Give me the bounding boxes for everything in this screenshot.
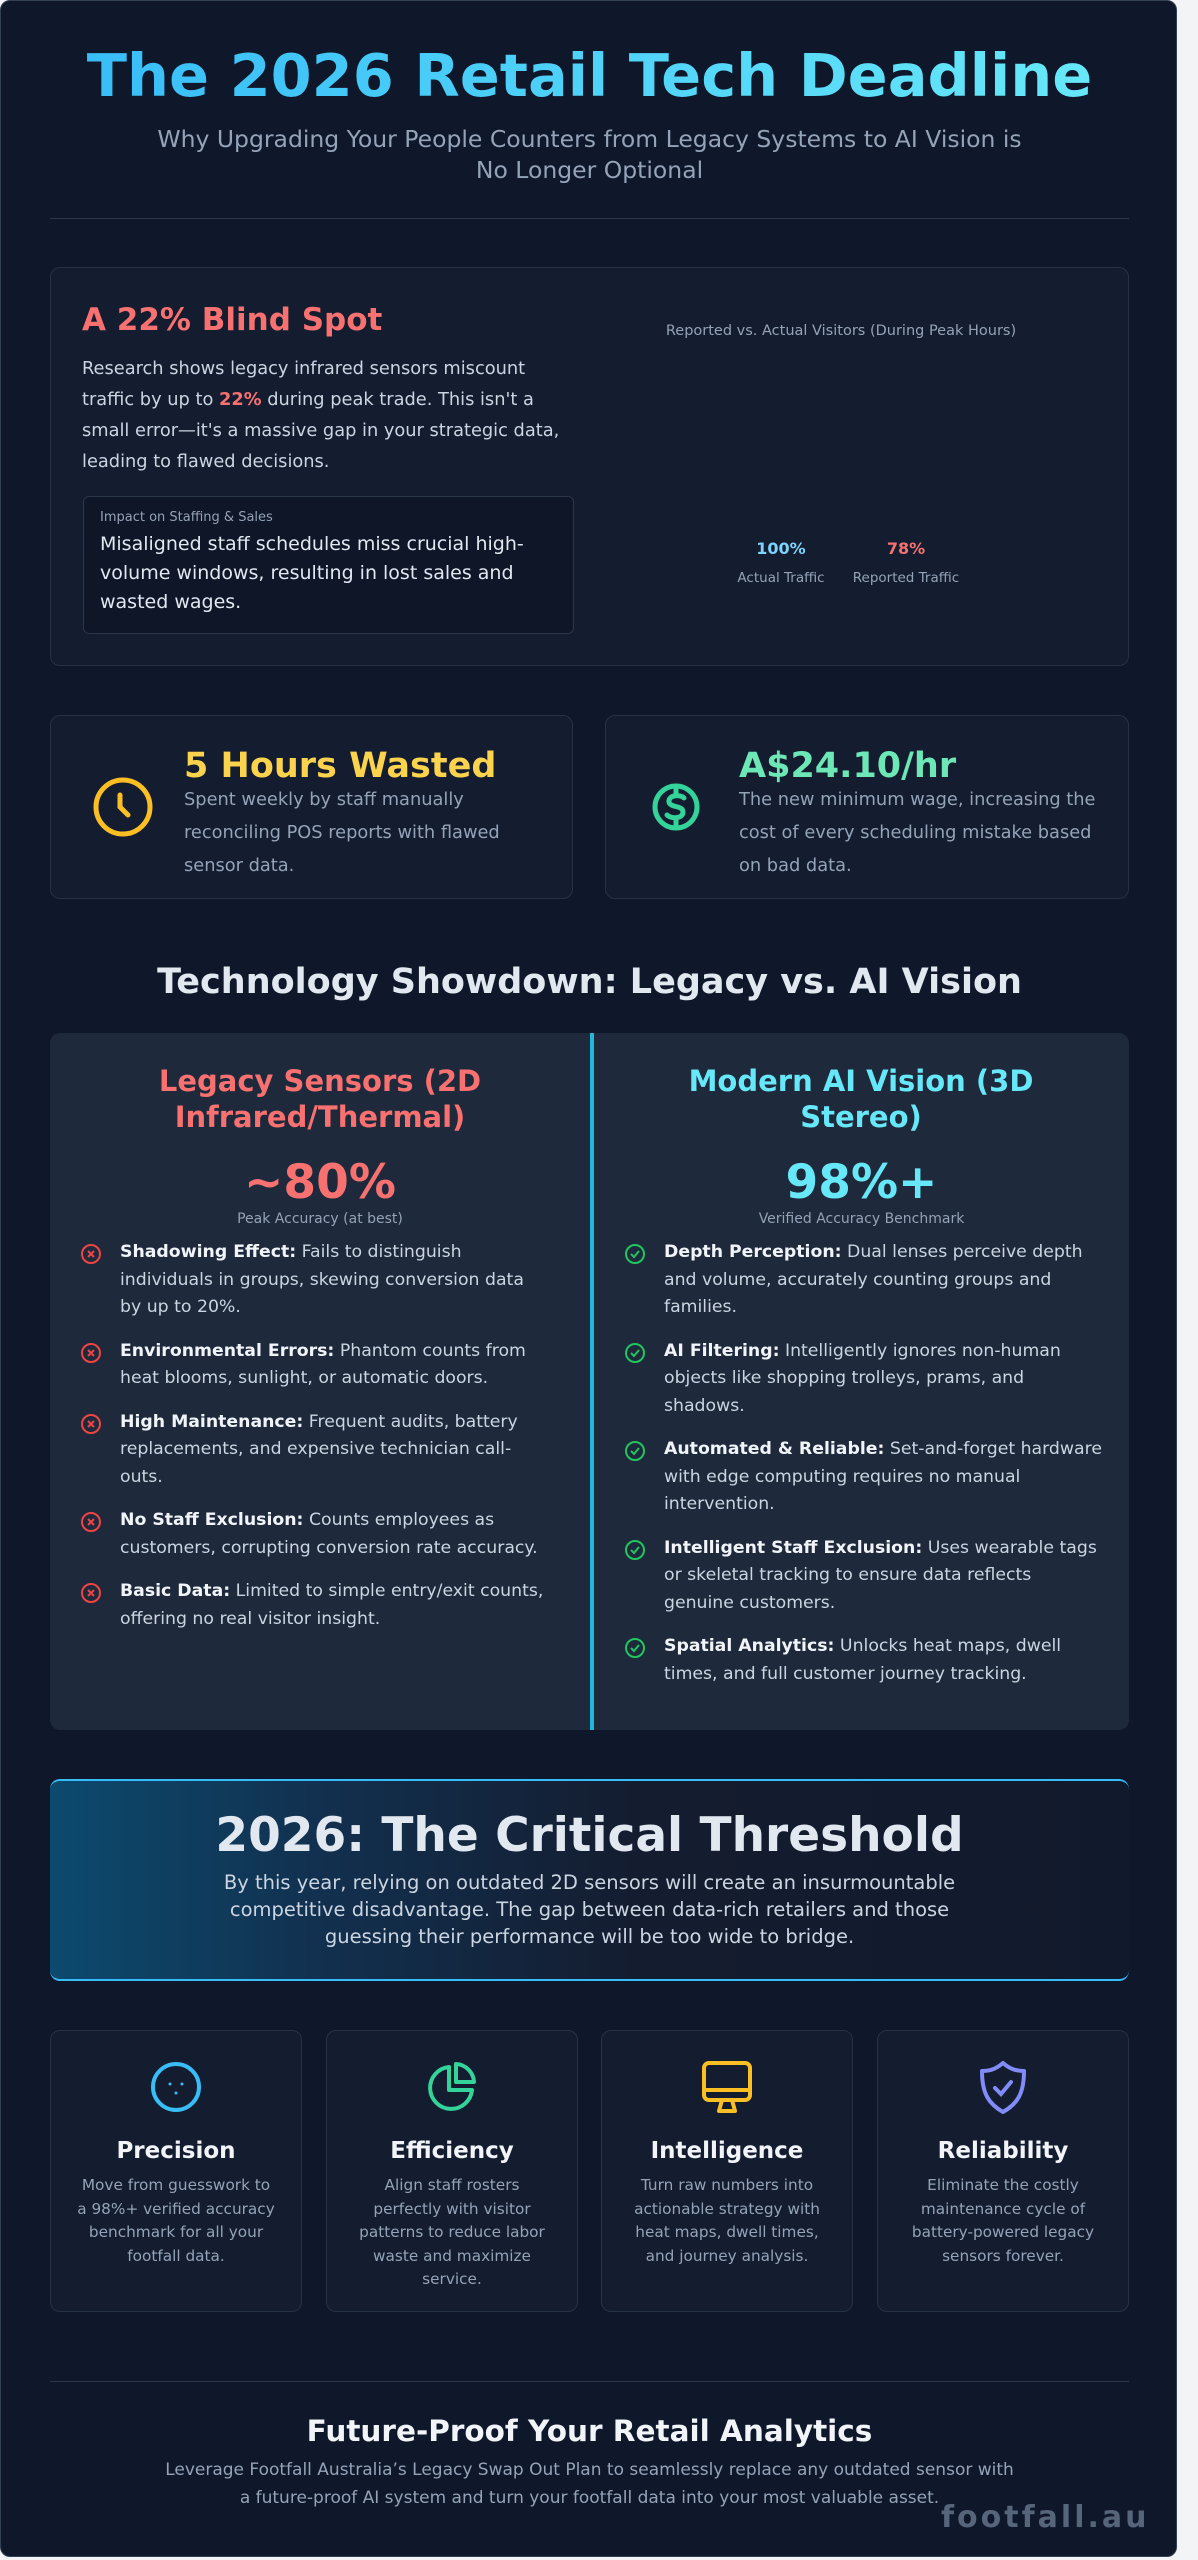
panel: 5 hours wasted bbox=[50, 715, 573, 899]
card: precision bbox=[50, 2030, 302, 2312]
stat text: A$24.10/hr bbox=[739, 746, 956, 786]
subtitle: Why Upgrading Your People Counters from Legacy Systems to AI Vision is bbox=[157, 125, 1022, 153]
card: precision: Precision bbox=[116, 2138, 236, 2164]
heading: showdown: Technology Showdown: Legacy vs. AI Vision bbox=[157, 962, 1022, 1002]
stat: 80%: ~80% bbox=[244, 1155, 396, 1210]
list: ai benefits: Depth Perception: Dual lenses perceive depth and volume, accurately counting groups and families. bbox=[664, 1242, 1083, 1317]
card: reliability: Eliminate the costly maintenance cycle of battery-powered legacy sensors forever. bbox=[912, 2176, 1094, 2264]
card: efficiency: perfectly with visitor patterns to reduce labor waste and maximize service. bbox=[359, 2200, 545, 2288]
panel: comparison bbox=[50, 1033, 1129, 1730]
text: threshold: By this year, relying on outdated 2D sensors will create an insurmountable competitive disadvantage. The gap between data-rich retailers and those guessing their performance will be too wide to bridge. bbox=[224, 1871, 955, 1948]
list: legacy issues: No Staff Exclusion: Counts employees as customers, corrupting conversion rate accuracy. bbox=[120, 1510, 538, 1558]
heading: future-proof: Future-Proof Your Retail Analytics bbox=[307, 2414, 872, 2448]
stat: 80%: Peak Accuracy (at best) bbox=[237, 1211, 403, 1227]
panel: minimum wage bbox=[605, 715, 1129, 899]
stat: 80% bbox=[237, 1155, 403, 1227]
stat text: The new minimum wage, increasing the cost of every scheduling mistake based on bad data. bbox=[739, 789, 1095, 876]
card: intelligence bbox=[601, 2030, 853, 2312]
text: research: Research shows legacy infrared sensors miscount traffic by up to 22% during peak trade. This isn't a small error—it's a massive gap in your strategic data, leading to flawed decisions. bbox=[82, 358, 559, 472]
stat: 98%: 98%+ bbox=[786, 1155, 937, 1210]
card: intelligence: Intelligence bbox=[651, 2138, 803, 2164]
callout: impact: Impact on Staffing & Sales bbox=[100, 510, 273, 525]
text: footer: Leverage Footfall Australia’s Legacy Swap Out Plan to seamlessly replace any outdated sensor with a future-proof AI system and turn your footfall data into your most valuable asset. bbox=[165, 2460, 1014, 2508]
title: The 2026 Retail Tech Deadline bbox=[87, 41, 1092, 110]
list: legacy issues: High Maintenance: Frequent audits, battery replacements, and expensive technician call-outs. bbox=[120, 1412, 518, 1486]
bar label: actual: 100% bbox=[756, 539, 806, 558]
bar label: reported: Reported Traffic bbox=[853, 570, 959, 586]
card: precision: Move from guesswork to a 98%+ verified accuracy benchmark for all your footfall data. bbox=[77, 2176, 275, 2264]
icon: monitor bbox=[702, 2061, 752, 2113]
heading: blind spot: A 22% Blind Spot bbox=[82, 302, 382, 338]
chart: reported vs actual bbox=[666, 323, 1016, 586]
list: legacy issues: Shadowing Effect: Fails to distinguish individuals in groups, skewing conversion data by up to 20%. bbox=[120, 1242, 524, 1317]
list: ai benefits: Spatial Analytics: Unlocks heat maps, dwell times, and full customer journey tracking. bbox=[664, 1636, 1061, 1684]
bar label: actual: Actual Traffic bbox=[737, 570, 825, 586]
heading: legacy: Legacy Sensors (2D Infrared/Thermal) bbox=[159, 1064, 481, 1134]
icon: dollar bbox=[652, 784, 700, 830]
callout: impact: Misaligned staff schedules miss crucial high-volume windows, resulting in lost sales and wasted wages. bbox=[100, 533, 524, 613]
column: ai vision bbox=[625, 1064, 1102, 1684]
bar label: reported: 78% bbox=[887, 539, 925, 558]
icon: face bbox=[151, 2062, 201, 2112]
card: efficiency: Efficiency bbox=[390, 2138, 514, 2164]
card: intelligence: Turn raw numbers into actionable strategy with heat maps, dwell times, and journey analysis. bbox=[634, 2176, 820, 2264]
stat text bbox=[184, 746, 500, 876]
bar label: reported bbox=[853, 539, 959, 586]
icon: shield check bbox=[980, 2060, 1026, 2114]
bar label: actual bbox=[737, 539, 825, 586]
list: ai benefits: AI Filtering: Intelligently ignores non-human objects like shopping trolleys, prams, and shadows. bbox=[664, 1340, 1061, 1416]
stat text: 5 Hours Wasted bbox=[184, 746, 496, 786]
stat text: Spent weekly by staff manually reconciling POS reports with flawed sensor data. bbox=[184, 789, 500, 876]
banner: critical threshold bbox=[50, 1779, 1129, 1981]
chart: reported vs actual: Reported vs. Actual Visitors (During Peak Hours) bbox=[666, 323, 1016, 339]
heading: threshold: 2026: The Critical Threshold bbox=[215, 1808, 964, 1863]
list: legacy issues bbox=[81, 1242, 543, 1628]
stat: 98%: Verified Accuracy Benchmark bbox=[759, 1211, 964, 1227]
list: legacy issues: Environmental Errors: Phantom counts from heat blooms, sunlight, or automatic doors. bbox=[120, 1340, 526, 1388]
watermark: footfall.au: footfall.au bbox=[941, 2500, 1149, 2535]
card: efficiency: Align staff rosters bbox=[385, 2176, 519, 2194]
stat text bbox=[738, 746, 1095, 876]
subtitle: No Longer Optional bbox=[476, 156, 703, 184]
stat: 98% bbox=[758, 1155, 964, 1227]
card: efficiency bbox=[326, 2030, 578, 2312]
icon: pie chart bbox=[428, 2062, 476, 2111]
callout: impact bbox=[83, 496, 574, 634]
card: reliability bbox=[877, 2030, 1129, 2312]
list: ai benefits: Automated & Reliable: Set-and-forget hardware with edge computing requires no manual intervention. bbox=[664, 1439, 1102, 1514]
column: legacy bbox=[81, 1064, 543, 1628]
heading: ai: Modern AI Vision (3D Stereo) bbox=[689, 1064, 1033, 1134]
panel: blind spot bbox=[50, 267, 1129, 666]
subtitle bbox=[157, 125, 1022, 184]
list: legacy issues: Basic Data: Limited to simple entry/exit counts, offering no real visitor insight. bbox=[120, 1581, 543, 1628]
list: ai benefits bbox=[625, 1242, 1102, 1684]
card: reliability: Reliability bbox=[938, 2138, 1068, 2164]
icon: clock bbox=[94, 778, 152, 836]
list: ai benefits: Intelligent Staff Exclusion: Uses wearable tags or skeletal tracking to ensure data reflects genuine customers. bbox=[664, 1538, 1097, 1612]
